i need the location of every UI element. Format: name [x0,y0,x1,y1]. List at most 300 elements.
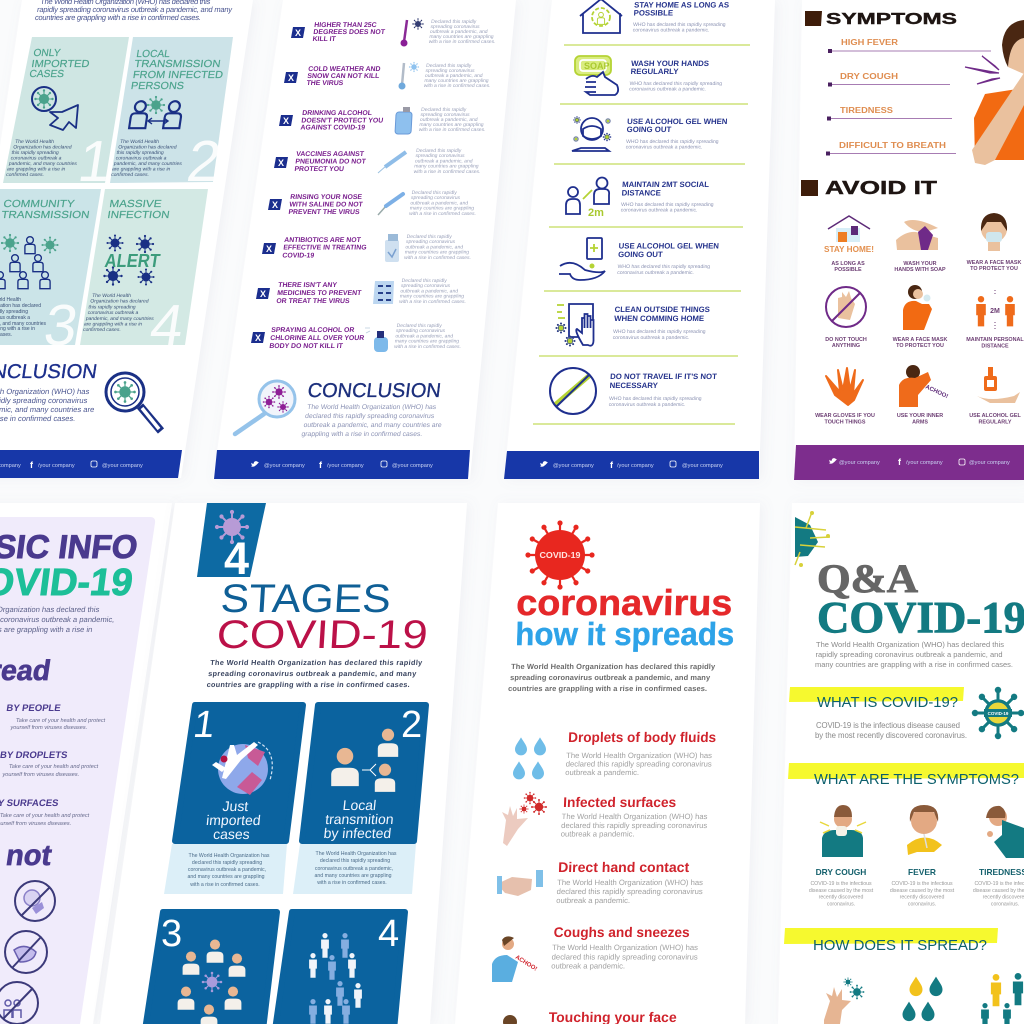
spread items: declared this rapidly spreading coronavirus [565,760,712,769]
list titles and text: coronavirus outbreak a pandemic. [609,402,686,408]
myth rows: COVID-19 [282,252,315,259]
myth rows: X [278,158,284,168]
intro text: countries are grappling with a rise in confirmed cases. [508,684,707,693]
panel: local transmission: this rapidly spreading [116,150,164,156]
card 1: imported cases: and many countries are grappling [188,874,265,880]
panel: local transmission [110,37,233,194]
myth descriptions: with a rise in confirmed cases. [399,299,466,305]
myth rows: DOESN'T PROTECT YOU [301,117,384,124]
card 1: imported cases: coronavirus outbreak a pandemic, [188,867,266,873]
myth rows: WITH SALINE DO NOT [289,202,364,208]
list titles and text: USE ALCOHOL GEL WHEN [618,242,720,250]
conclusion heading: CONCLUSION [306,380,442,402]
title: STAGES [219,577,392,621]
title: how it spreads [515,616,735,652]
list icons: 2m [588,207,604,219]
myth descriptions: outbreak a pandemic, and [400,288,459,294]
list titles and text: coronavirus outbreak a pandemic. [633,28,710,33]
list titles and text: REGULARLY [630,67,679,76]
spread items: The World Health Organization (WHO) has [566,751,712,760]
myth rows [251,22,387,350]
card 1: imported cases: declared this rapidly spreading [192,860,262,866]
avoid-it labels: WEAR GLOVES IF YOU [815,413,875,419]
panel: massive infection: The World Health [92,293,132,299]
icon: red virus [525,520,595,590]
card 2: local transmission: 2 [401,704,422,746]
question: what is covid [789,687,967,740]
title [515,582,735,652]
list titles and text: WHO has declared this rapidly spreading [613,329,706,335]
spread items: yourself from viruses diseases. [10,725,88,731]
myth rows: SNOW CAN NOT KILL [307,73,380,80]
card 2: local transmission: declared this rapidly spreading [320,858,390,864]
myth rows: COLD WEATHER AND [308,66,381,73]
myth descriptions: with a rise in confirmed cases. [394,344,461,350]
spread items: Direct hand contact [558,859,690,875]
footer: f [319,460,323,470]
spread items: yourself from viruses diseases. [2,772,80,778]
prohibition icons [0,881,55,1024]
footer: @your company [264,463,305,469]
question: what is covid: COVID-19 is the infectious disease caused [816,721,960,730]
card 1: imported cases: 1 [191,703,218,746]
intro text [508,662,716,693]
list icons [550,0,622,414]
spread items: outbreak a pandemic. [565,768,639,777]
icon: magnifier with viruses [235,381,295,434]
avoid-it labels: DISTANCE [981,344,1009,350]
myth rows: VACCINES AGAINST [296,151,365,158]
myth descriptions: Declared this rapidly [421,107,467,113]
card 2: local transmission: and many countries are grappling [314,873,392,879]
panel: massive infection: confirmed cases. [83,327,121,333]
avoid-it labels: HANDS WITH SOAP [894,267,946,273]
panel: local transmission: 2 [183,129,225,194]
myth descriptions: outbreak a pandemic, and [430,29,488,35]
panel: massive infection: ALERT [103,251,162,272]
avoid-it labels [815,260,1024,426]
icon: magnifier [106,373,161,431]
myth descriptions: spreading coronavirus [430,24,480,30]
title [0,529,140,604]
intro text: rapidly spreading coronavirus outbreak a pandemic, and [816,650,1002,659]
page 4: symptoms and avoid it [794,0,1024,480]
spread items: Take care of your health and protect [0,813,90,819]
card 1: imported cases: Just [222,798,249,814]
avoid-it labels: MAINTAIN PERSONAL [966,337,1024,343]
card 2: local transmission: with a rise in confirmed cases. [317,880,387,886]
spread items [548,729,717,1024]
myth descriptions: spreading coronavirus [411,195,461,201]
title: Q&A [817,556,918,601]
spread items: The World Health Organization (WHO) has [557,878,703,887]
list titles and text: DISTANCE [621,188,661,197]
list titles and text: WHO has declared this rapidly spreading [626,139,719,145]
symptom labels: disease caused by the most [890,888,955,894]
footer: @your company [102,463,143,469]
title: COVID-19 [817,593,1024,642]
card 2: local transmission: coronavirus outbreak a pandemic, [315,866,393,872]
page 8: Q and A [778,503,1024,1024]
footer: /your company [327,463,364,469]
panel: massive infection: Organization has declared [90,299,149,305]
avoid-it labels: USE ALCOHOL GEL [969,413,1021,419]
intro text [0,605,115,634]
spread items: outbreak a pandemic. [556,896,630,905]
panel: only imported cases [3,37,129,194]
page 7: how it spreads [455,503,760,1024]
myth descriptions: spreading coronavirus [415,153,465,159]
spread items: BY DROPLETS [0,750,68,761]
myth rows: KILL IT [312,36,337,43]
card 4: massive: 4 [378,913,399,955]
myth rows: X [283,116,289,126]
footer: f [898,457,902,467]
myth descriptions: many countries are grappling [419,122,484,128]
card 2: local transmission: by infected [323,825,392,841]
card 1: imported cases: imported [206,812,261,828]
myth descriptions: Declared this rapidly [401,278,448,284]
list titles and text [609,1,729,408]
myth descriptions: many countries are grappling [394,339,460,345]
panel: massive infection: are grappling with a rise in [83,322,143,327]
panel: only imported cases: are grappling with a rise in [7,167,66,173]
myth rows: OR TREAT THE VIRUS [276,298,350,305]
myth descriptions: Declared this rapidly [411,190,458,196]
footer: @your company [682,463,723,469]
lavender panel [0,517,155,1024]
myth rows: X [272,200,278,210]
intro text: The World Health Organization (WHO) has declared this [816,640,1004,649]
panel: local transmission: coronavirus outbreak a [115,156,167,162]
myth rows: PREVENT THE VIRUS [288,209,360,216]
intro text [815,640,1013,669]
myth icons [365,18,424,352]
myth descriptions: many countries are grappling [424,78,489,84]
list titles and text: GOING OUT [618,250,663,259]
card 2: local transmission [293,704,426,894]
list titles and text: POSSIBLE [633,8,673,17]
avoid-it labels: TO PROTECT YOU [970,266,1018,272]
page 6: 4 stages [100,503,467,1024]
spread icons: ACHOO! [514,955,538,973]
spread items [0,703,106,827]
myth descriptions: many countries are grappling [404,250,470,256]
card 4: massive [275,912,405,1024]
intro text [206,658,424,689]
panel: only imported cases: ONLY [33,48,61,59]
panel: only imported cases: CASES [29,69,65,80]
panel: massive infection: 4 [146,293,188,358]
panel: local transmission: PERSONS [130,81,185,92]
intro text: many countries are grappling with a rise in confirmed cases. [815,660,1013,669]
list titles and text: coronavirus outbreak a pandemic. [613,335,690,341]
panel: only imported cases: pandemic, and many countries [8,161,78,167]
card 1: imported cases: with a rise in confirmed cases. [190,882,260,888]
title [215,577,429,657]
question: what is covid: WHAT IS COVID-19? [817,694,958,711]
myth descriptions: Declared this rapidly [416,148,462,154]
icon: half virus logo [795,511,830,567]
list titles and text: CLEAN OUTSIDE THINGS [614,305,710,314]
list titles and text: coronavirus outbreak a pandemic. [617,270,694,276]
list titles and text: GOING OUT [626,125,672,134]
panel: massive infection: this rapidly spreading [88,304,136,310]
avoid-it labels: WEAR A FACE MASK [893,337,947,343]
panel: only imported cases: this rapidly spreading [11,150,59,156]
avoid-it icons: 2M [990,308,1000,315]
myth rows: EFFECTIVE IN TREATING [283,245,367,252]
card 3: community: 3 [161,913,182,955]
symptom labels: disease caused by the most [809,888,874,894]
symptoms list: HIGH FEVER [841,38,898,47]
footer [504,451,759,479]
myth descriptions: outbreak a pandemic, and [405,244,464,250]
list titles and text: WASH YOUR HANDS [631,59,709,68]
myth descriptions: many countries are grappling [409,206,475,212]
panel: massive infection: INFECTION [107,210,170,221]
footer: @your company [553,463,594,469]
card 1: imported cases [164,703,303,894]
symptom labels: coronavirus. [908,901,936,907]
footer: @your company [392,463,433,469]
myth descriptions: Declared this rapidly [406,234,453,240]
panel: community transmission [0,189,101,358]
panel: only imported cases: 1 [74,129,116,194]
badge: 4 with virus: 4 [224,533,249,584]
spread items: Take care of your health and protect [15,718,106,724]
heading: symptoms: SYMPTOMS [826,11,957,28]
list titles and text: WHO has declared this rapidly spreading [633,22,726,28]
symptom icons [820,805,1024,858]
list titles and text: WHO has declared this rapidly spreading [621,202,714,208]
card 3: community [145,912,277,1024]
title: COVID-19 [215,613,429,657]
symptoms list [826,38,991,156]
panel: local transmission: LOCAL [136,49,171,60]
myth rows: X [295,28,301,38]
list titles and text: WHEN COMMING HOME [614,314,704,323]
symptom labels: COVID-19 is the infectious [810,881,872,887]
panel: only imported cases: coronavirus outbreak a [10,156,62,162]
list titles and text: coronavirus outbreak a pandemic. [621,208,698,213]
myth descriptions: with a rise in confirmed cases. [404,255,471,261]
list titles and text: WHO has declared this rapidly spreading [609,396,702,402]
panel: massive infection: pandemic, and many countries [85,316,155,322]
myth rows: THE VIRUS [306,80,344,87]
page 5: basic info [0,503,172,1024]
symptom labels: COVID-19 is the infectious [891,881,953,887]
page 1: four stages with teal panels [0,0,253,478]
myth rows: MEDICINES TO PREVENT [277,290,362,297]
avoid-it labels: TOUCH THINGS [825,420,866,426]
icon: covid virus badge [972,687,1024,739]
spread items: The World Health Organization (WHO) has [552,943,698,952]
list titles and text: MAINTAIN 2MT SOCIAL [622,180,709,189]
spread items: outbreak a pandemic. [561,830,635,839]
card 2: local transmission: transmition [325,811,394,827]
spread items: BY PEOPLE [6,703,61,714]
intro text: The World Health Organization has declared this rapidly [210,658,424,667]
footer: /your company [906,460,943,466]
panel: community transmission: COMMUNITY [3,199,75,210]
avoid-it labels: ANYTHING [832,343,860,349]
myth rows: AGAINST COVID-19 [300,125,366,132]
conclusion text: grappling with a rise in confirmed cases. [301,431,423,438]
panel: only imported cases: Organization has declared [13,145,72,150]
conclusion text: The World Health Organization (WHO) has [307,404,437,411]
page 3: prevention list [504,0,775,479]
symptoms list: DIFFICULT TO BREATH [839,141,946,150]
myth descriptions: outbreak a pandemic, and [410,200,469,206]
myth descriptions: spreading coronavirus [425,68,475,74]
symptom labels: coronavirus. [991,901,1019,907]
avoid-it icons: STAY HOME! [824,245,874,254]
myth descriptions: outbreak a pandemic, and [415,158,473,164]
myth descriptions: outbreak a pandemic, and [395,333,454,339]
icon: red virus: COVID-19 [540,550,581,560]
footer: @your company [969,460,1010,466]
footer [214,450,470,479]
myth descriptions: many countries are grappling [414,164,479,170]
intro text: countries are grappling with a rise in confirmed cases. [34,13,202,22]
myth descriptions: Declared this rapidly [431,19,477,25]
spread items: Droplets of body fluids [568,729,717,745]
heading: symptoms [805,11,957,28]
question: how it spreads [784,928,998,954]
conclusion text: declared this rapidly spreading coronavirus [305,413,435,420]
myth descriptions: many countries are grappling [429,34,494,40]
myth descriptions: spreading coronavirus [396,328,446,334]
list icons: SOAP [584,61,610,71]
spread items: Take care of your health and protect [8,764,99,770]
badge: 4 with virus [197,503,266,584]
title [817,556,1024,642]
panel: local transmission: FROM INFECTED [132,70,224,81]
green dividers [533,45,750,424]
symptoms list: DRY COUGH [840,72,898,81]
myth rows: X [266,244,272,254]
question: what is covid: by the most recently discovered coronavirus. [815,731,967,740]
intro text: The World Health Organization has declared this rapidly [511,662,716,671]
symptom labels: recently discovered [819,895,863,901]
avoid-it icons: ACHOO! [924,384,949,400]
myth descriptions: spreading coronavirus [406,239,456,245]
list titles and text: DO NOT TRAVEL IF IT'S NOT [610,372,717,381]
panel: community transmission: 3 [40,293,82,358]
avoid-it labels: ARMS [912,420,928,426]
footer: /your company [38,463,75,469]
card 2: local transmission: Local [342,797,377,813]
panel: massive infection: coronavirus outbreak a [87,310,139,316]
intro text: spreading coronavirus outbreak a pandemic, and many [208,669,418,678]
list titles and text: WHO has declared this rapidly spreading [617,264,710,270]
avoid-it labels: POSSIBLE [834,267,862,273]
spread items: Coughs and sneezes [553,924,690,940]
spread items: declared this rapidly spreading coronavirus [551,952,698,961]
symptom labels: DRY COUGH [816,867,866,877]
myth rows: THERE ISN'T ANY [278,282,338,289]
myth descriptions [394,19,498,350]
card 1: imported cases: The World Health Organization has [189,853,270,859]
myth rows: SPRAYING ALCOHOL OR [271,327,355,334]
avoid-it icons [824,213,1020,407]
panel: only imported cases: IMPORTED [31,59,90,70]
panel: local transmission: are grappling with a rise in [112,167,171,173]
page 2: myths list [213,0,516,479]
myth descriptions: Declared this rapidly [426,63,472,69]
myth rows: X [260,289,266,299]
intro text: rapidly spreading coronavirus outbreak a pandemic, and many [37,5,233,14]
spread items: declared this rapidly spreading coronavirus [556,887,703,896]
myth rows: DRINKING ALCOHOL [302,110,372,117]
list titles and text: USE ALCOHOL GEL WHEN [627,117,728,126]
footer [0,450,182,478]
myth rows: BODY DO NOT KILL IT [269,343,344,350]
intro text: spreading coronavirus outbreak a pandemic, and many [510,673,711,682]
panel: local transmission: pandemic, and many countries [113,161,183,167]
myth descriptions: spreading coronavirus [401,283,451,289]
avoid-it labels: AS LONG AS [831,261,865,267]
question: symptoms: WHAT ARE THE SYMPTOMS? [814,771,1019,788]
list titles and text: WHO has declared this rapidly spreading [629,81,722,87]
avoid-it labels: DO NOT TOUCH [825,337,867,343]
symptom labels: coronavirus. [827,901,855,907]
panel: local transmission: confirmed cases. [111,172,149,178]
heading: avoid it [801,178,937,198]
myth rows: X [255,333,261,343]
myth descriptions: spreading coronavirus [420,112,470,118]
intro text: countries are grappling with a rise in confirmed cases. [206,680,410,689]
myth descriptions: with a rise in confirmed cases. [409,211,476,217]
myth descriptions: with a rise in confirmed cases. [418,127,486,133]
myth rows: PNEUMONIA DO NOT [295,159,367,165]
avoid-it labels: REGULARLY [978,420,1012,426]
avoid-it labels: WASH YOUR [903,261,937,267]
myth rows: DEGREES DOES NOT [313,29,386,36]
symptoms list: TIREDNESS [840,106,894,115]
icon: coughing person [965,20,1024,165]
card 1: imported cases: cases [212,826,251,842]
panel: massive infection: MASSIVE [109,199,162,210]
symptom labels [809,867,1024,907]
myth descriptions: many countries are grappling [399,294,465,300]
footer: f [610,460,614,470]
spread icons [492,737,547,1024]
footer: @your company [839,460,880,466]
spread items: outbreak a pandemic. [551,962,625,971]
spread items: The World Health Organization (WHO) has [561,812,708,821]
myth descriptions: with a rise in confirmed cases. [423,83,491,89]
panel: local transmission: Organization has declared [118,145,177,150]
avoid-it labels: TO PROTECT YOU [896,343,944,349]
panel: massive infection [80,189,208,358]
list titles and text: coronavirus outbreak a pandemic. [629,87,706,92]
symptom labels: recently discovered [900,895,944,901]
myth rows: X [288,73,294,83]
panel: community transmission: TRANSMISSION [1,210,90,221]
myth rows: CHLORINE ALL OVER YOUR [270,335,365,342]
avoid-it labels: WEAR A FACE MASK [967,260,1021,266]
panel: only imported cases: The World Health [15,139,55,145]
myth descriptions: outbreak a pandemic, and [420,117,478,123]
footer: f [30,460,34,470]
list titles and text: NECESSARY [609,381,659,390]
myth descriptions: with a rise in confirmed cases. [413,169,481,175]
conclusion text: outbreak a pandemic, and many countries are [303,422,442,429]
myth rows: ANTIBIOTICS ARE NOT [284,237,362,244]
myth rows: HIGHER THAN 25C [314,22,377,29]
